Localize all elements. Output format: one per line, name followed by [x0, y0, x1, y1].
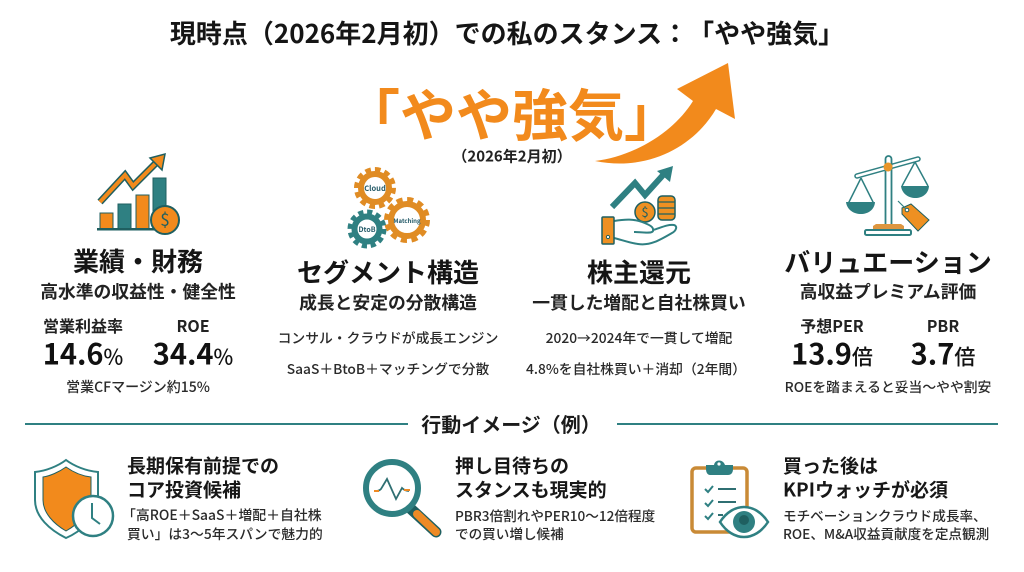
- metric label: ROE: ROE: [176, 313, 210, 337]
- body text: PBR3倍割れやPER10〜12倍程度: [455, 505, 655, 525]
- body text line two: ROE、M&A収益貢献度を定点観測: [783, 523, 989, 543]
- subheading: 一貫した増配と自社株買い: [532, 289, 746, 315]
- panel: performance and finance: [40, 153, 236, 397]
- heading line two: スタンスも現実的: [455, 476, 607, 502]
- subheading: 高水準の収益性・健全性: [40, 278, 236, 304]
- action: KPI watch: [690, 452, 989, 543]
- hero date: （2026年2月初）: [452, 146, 572, 166]
- heading: セグメント構造: [297, 253, 479, 290]
- heading: 長期保有前提での: [127, 452, 279, 478]
- metric value: PBR: 3.7倍: [911, 332, 975, 374]
- hero stance: [344, 63, 735, 166]
- metric value: ROE: 34.4%: [153, 332, 233, 374]
- icon: hand with coins: $: [641, 202, 649, 221]
- icon: three gears: DtoB: [359, 225, 376, 235]
- body text line two: 買い」は3〜5年スパンで魅力的: [127, 523, 323, 543]
- heading: 株主還元: [587, 253, 691, 290]
- hero text: 「やや強気」: [344, 72, 680, 153]
- heading: 押し目待ちの: [455, 452, 569, 478]
- subheading: 成長と安定の分散構造: [299, 289, 477, 315]
- panel: shareholder returns: [526, 166, 746, 378]
- metric value: operating margin: 14.6%: [43, 332, 123, 374]
- text: dividend growth: 2020→2024年で一貫して増配: [546, 327, 732, 347]
- panel: valuation: [784, 155, 992, 396]
- body text: 「高ROE＋SaaS＋増配＋自社株: [122, 505, 322, 525]
- metric label: PBR: PBR: [927, 313, 959, 337]
- icon: shield with clock: [34, 458, 114, 540]
- metric label: forward PER: 予想PER: [800, 313, 864, 337]
- icon: rising arrow: [595, 63, 735, 164]
- action: core holding: [34, 452, 323, 543]
- body text: モチベーションクラウド成長率、: [783, 505, 987, 525]
- section heading: 行動イメージ（例）: [421, 409, 601, 438]
- heading line two: コア投資候補: [127, 476, 241, 502]
- icon: three gears: Matching: [393, 216, 421, 225]
- icon: clipboard with eye: [690, 460, 770, 538]
- icon: scales with price tag: [846, 155, 930, 236]
- text: diversification: SaaS＋BtoB＋マッチングで分散: [287, 358, 489, 378]
- text: buybacks: 4.8%を自社株買い＋消却（2年間）: [526, 358, 746, 378]
- icon: magnifying glass: [363, 459, 442, 538]
- heading: バリュエーション: [784, 243, 992, 280]
- text: growth engine: コンサル・クラウドが成長エンジン: [278, 327, 498, 347]
- note: ROEを踏まえると妥当〜やや割安: [785, 376, 991, 396]
- icon: bar chart with coin: $: [160, 206, 170, 231]
- metric value: forward PER: 13.9倍: [791, 332, 873, 374]
- title: 現時点（2026年2月初）での私のスタンス：「やや強気」: [170, 14, 844, 51]
- icon: three gears: [348, 167, 430, 248]
- note: 営業CFマージン約15%: [66, 377, 210, 397]
- heading: 業績・財務: [73, 242, 203, 279]
- body text line two: での買い増し候補: [455, 523, 564, 543]
- icon: three gears: Cloud: [364, 183, 386, 194]
- icon: bar chart with coin: [97, 153, 180, 235]
- metric label: operating margin: 営業利益率: [43, 313, 123, 337]
- icon: hand with coins: [601, 166, 678, 246]
- heading line two: KPIウォッチが必須: [783, 476, 948, 502]
- action: wait for pullback: [363, 452, 655, 543]
- heading: 買った後は: [783, 452, 878, 478]
- panel: segment structure: [278, 167, 498, 378]
- subheading: 高収益プレミアム評価: [800, 278, 976, 304]
